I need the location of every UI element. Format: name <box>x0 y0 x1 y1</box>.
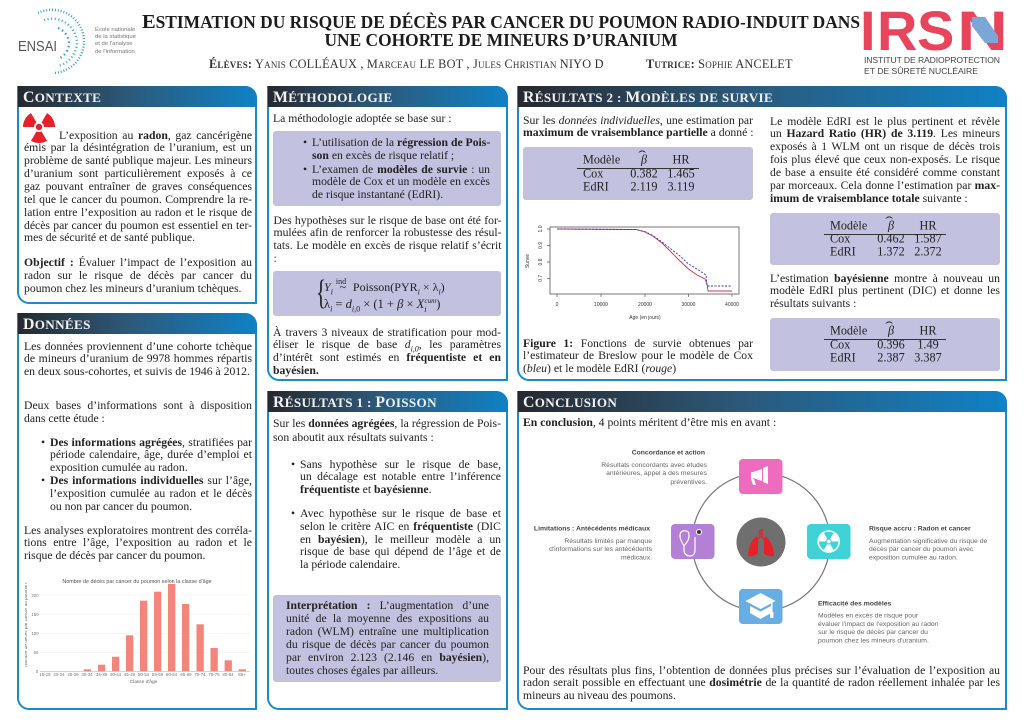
bar chart: décès par classe d'âge: Nombre de décès par cancer du poumon selon la classe d'âge <box>62 579 212 585</box>
text: contexte: L’exposition au radon, gaz cancérigène <box>59 129 252 142</box>
labels: Concordance et action <box>632 450 705 456</box>
bar chart: décès par classe d'âge: 200 <box>31 593 39 598</box>
text: objectif <box>24 256 252 295</box>
text: vraisemblance partielle: maximum de vraisemblance partielle a donné : <box>523 126 753 139</box>
icon: mégaphone <box>739 459 782 494</box>
heading: données <box>18 313 257 334</box>
text: contexte: tel que le cancer du poumon. Comprendre la re- <box>24 193 252 206</box>
bar chart: décès par classe d'âge: 85+ <box>238 672 246 677</box>
bar chart: décès par classe d'âge: 0 <box>36 669 39 674</box>
list: méthodes <box>304 136 490 201</box>
line chart: fonctions de survie: 20000 <box>638 302 652 308</box>
line chart: fonctions de survie: Survie <box>525 254 531 268</box>
labels: poumon chez les mineurs d'uranium. <box>818 638 929 644</box>
list: avec hypothèse: selon le critère AIC en fréquentiste (DIC <box>300 520 501 533</box>
text: analyses: Les analyses exploratoires montrent des corréla- <box>24 524 252 537</box>
table: vraisemblance totale: Cox <box>830 232 850 246</box>
text: interprétation: radon (WLM) entraîne une multiplication <box>286 625 489 638</box>
text: interprétation: unité de la moyenne des expositions au <box>286 612 489 625</box>
labels: d'informations sur les antécédents <box>549 546 653 553</box>
line chart: fonctions de survie: Age (en jours) <box>629 315 661 321</box>
list: bases: Des informations individuelles sur l’âge, <box>50 474 252 487</box>
bar chart: décès par classe d'âge: 50-54 <box>138 672 150 677</box>
logo: IRSN <box>860 6 1008 76</box>
labels: Modèles en excès de risque pour <box>818 612 919 620</box>
caption: figure 1 <box>523 337 753 375</box>
logo: IRSN: INSTITUT DE RADIOPROTECTION <box>864 55 1000 65</box>
text: hazard ratio: de base a ensuite été considéré comme constant <box>770 166 1000 179</box>
heading: contexte: CONTEXTE <box>23 89 101 106</box>
text: objectif: Objectif : Évaluer l’impact de l’exposition au <box>24 256 252 269</box>
text: contexte: décès par cancer du poumon est essentiel en ter- <box>24 218 252 232</box>
table: vraisemblance totale <box>770 213 1000 265</box>
heading: méthodologie: MÉTHODOLOGIE <box>273 89 393 106</box>
table: bayésien: 1.49 <box>917 338 939 352</box>
table: vraisemblance partielle: 3.119 <box>668 180 694 194</box>
table: bayésien: Cox <box>830 338 850 352</box>
text: contexte: d’uranium sont particulièrement exposés à ce <box>24 167 252 180</box>
line chart: fonctions de survie: 0 <box>556 302 559 308</box>
authors: Élèves: Yanis COLLÉAUX , Marceau LE BOT , Jules Christian NIYO D <box>209 57 604 71</box>
text: contexte: problème de santé publique majeur. Les mineurs <box>24 154 252 167</box>
formula: { <box>316 273 326 312</box>
panel: données <box>17 313 257 710</box>
bar chart: décès par classe d'âge: 100 <box>31 631 39 636</box>
table: vraisemblance partielle: β <box>641 152 647 166</box>
table: bayésien <box>770 318 1000 371</box>
line chart: fonctions de survie: 0.9 <box>538 242 544 249</box>
heading: résultats 1: RÉSULTATS 1 : POISSON <box>273 394 437 411</box>
text: perspectives <box>523 664 1000 702</box>
text: cohorte: en deux sous-cohortes, et suivis de 1946 à 2012. <box>24 365 250 378</box>
heading: conclusion <box>518 391 1007 412</box>
title <box>142 11 860 50</box>
list: bases <box>42 436 252 513</box>
list: sans hypothèse: fréquentiste et bayésienne. <box>300 483 431 496</box>
bar chart: décès par classe d'âge: 40-44 <box>110 672 122 677</box>
table: vraisemblance partielle <box>523 147 753 200</box>
bar chart: décès par classe d'âge: 30-34 <box>81 672 93 677</box>
text: perspectives: radon serait possible en effectuant une dosimétrie de la quantité de radon réellement inhalée par les <box>523 676 1000 689</box>
text: hypothèses: Des hypothèses sur le risque de base ont été for- <box>274 214 502 227</box>
line chart: fonctions de survie: 1.0 <box>538 225 544 232</box>
diagram: quatre points <box>534 450 987 644</box>
formula: ind <box>336 277 346 286</box>
text: interprétation: du risque de décès par cancer du poumon <box>286 638 489 651</box>
text: contexte: gaz pouvant entraîner de graves conséquences <box>24 180 252 193</box>
text: intro poisson: son aboutit aux résultats suivants : <box>273 431 434 444</box>
text: contexte: lation entre l’exposition au radon et le risque de <box>24 206 252 219</box>
labels: exposition cumulée au radon. <box>869 554 958 562</box>
text: hypothèses: : <box>274 252 277 265</box>
text: intro poisson: Sur les données agrégées, la régression de Pois- <box>273 417 501 430</box>
list: méthodes: L’utilisation de la régression de Pois- <box>312 136 490 149</box>
table: bayésien: β <box>888 324 894 338</box>
logo: ENSAI: de l'information <box>95 49 135 55</box>
text: hazard ratio <box>770 115 1000 205</box>
text: interprétation: par environ 2.123 (2.146 en bayésien), <box>286 651 489 664</box>
text: stratification: éliser le risque de base di,0, les paramètres <box>273 338 501 354</box>
text: stratification: d’intérêt sont estimés en fréquentiste et en <box>273 351 501 364</box>
panel: méthodologie <box>267 86 508 381</box>
table: vraisemblance totale: β <box>888 218 894 232</box>
table: vraisemblance totale: 0.462 <box>877 232 905 246</box>
icon: stéthoscope <box>671 524 714 559</box>
labels: médicaux. <box>621 554 652 562</box>
list: avec hypothèse: la période calendaire. <box>300 558 400 571</box>
list: méthodes: L’examen de modèles de survie : un <box>312 163 490 176</box>
table: vraisemblance totale: 1.587 <box>914 232 942 246</box>
text: hazard ratio: un Hazard Ratio (HR) de 3.119. Les mineurs <box>770 127 1000 140</box>
box: interprétation <box>273 595 501 682</box>
line chart: fonctions de survie: 30000 <box>682 302 696 308</box>
text: analyses: tions entre l’âge, l’exposition au radon et le <box>24 536 252 549</box>
text: stratification: À travers 3 niveaux de stratification pour mod- <box>273 326 501 339</box>
line chart: fonctions de survie: 40000 <box>725 302 739 308</box>
text: bayésienne: modèle EdRI plus pertinent (DIC) et donne les <box>770 284 1000 297</box>
list: méthodes: de risque instantané (EdRI). <box>312 188 443 201</box>
text: hazard ratio: imum de vraisemblance totale suivante : <box>770 192 968 205</box>
bar chart: décès par classe d'âge: 60-64 <box>166 672 178 677</box>
list: bases: exposition cumulée au radon. <box>50 461 188 474</box>
line chart: fonctions de survie <box>525 225 740 321</box>
table: bayésien: 2.387 <box>877 350 905 364</box>
list: avec hypothèse: en bayésien), le meilleur modèle a un <box>300 533 501 546</box>
panel: conclusion <box>517 391 1007 710</box>
list: sans hypothèse: un décalage est notable entre l’inférence <box>300 470 501 483</box>
table: vraisemblance partielle: Cox <box>583 166 603 180</box>
bar chart: décès par classe d'âge: 55-59 <box>152 672 164 677</box>
text: contexte: mes de sécurité et de santé publique. <box>24 231 195 244</box>
title: ESTIMATION DU RISQUE DE DÉCÈS PAR CANCER DU POUMON RADIO-INDUIT DANS <box>142 11 860 33</box>
text: objectif: poumon chez les mineurs d’uranium tchèques. <box>24 282 241 295</box>
list: avec hypothèse: Avec hypothèse sur le risque de base et <box>300 507 501 520</box>
list: méthodes: son en excès de risque relatif ; <box>312 149 454 162</box>
logo: ENSAI: ENSAI <box>18 39 57 55</box>
logo: ENSAI: École nationale <box>95 26 136 33</box>
icon: poumons <box>736 518 786 566</box>
icon: radiation <box>23 113 55 143</box>
bar chart: décès par classe d'âge: 80-84 <box>222 672 234 677</box>
bar chart: décès par classe d'âge: 45-49 <box>124 672 136 677</box>
labels <box>534 450 987 644</box>
table: vraisemblance partielle: Modèle <box>583 152 620 166</box>
labels: antérieures, appel à des mesures <box>606 470 708 477</box>
labels: Augmentation significative du risque de <box>869 538 987 545</box>
table: vraisemblance partielle: 2.119 <box>631 180 657 194</box>
labels: sur le risque de décès par cancer du <box>818 629 928 636</box>
labels: Résultats limités par manque <box>564 538 652 545</box>
logo: ENSAI: de la statistique <box>95 34 137 40</box>
text: cohorte: Les données proviennent d’une cohorte tchèque <box>24 340 252 353</box>
formula: ~ <box>340 280 346 294</box>
line chart: fonctions de survie: 10000 <box>594 302 608 308</box>
labels: Résultats concordants avec études <box>601 462 708 469</box>
bar chart: décès par classe d'âge: 35-39 <box>96 672 108 677</box>
box: méthodes <box>273 131 501 206</box>
labels: décès par cancer du poumon avec <box>869 546 974 553</box>
box: formule <box>273 271 501 316</box>
text: bases <box>24 399 252 425</box>
text: hazard ratio: exposés à 1 WLM ont un risque de décès trois <box>770 140 1000 153</box>
text: stratification <box>273 326 501 377</box>
list: avec hypothèse <box>292 507 501 571</box>
formula: Yi Poisson(PYRi × λi) <box>324 280 445 296</box>
heading: résultats 2 <box>518 86 1007 107</box>
text: intro conclusion: En conclusion, 4 points méritent d’être mis en avant : <box>523 416 776 429</box>
text: hazard ratio: fois plus élevé que ceux non-exposés. Le risque <box>770 153 1000 166</box>
table: vraisemblance partielle: EdRI <box>583 180 609 194</box>
logo: IRSN: ET DE SÛRETÉ NUCLÉAIRE <box>864 66 978 76</box>
list: méthodes: modèle de Cox et un modèle en excès <box>312 175 490 188</box>
labels: préventives. <box>670 479 707 486</box>
text: bayésienne: résultats suivants : <box>770 297 856 310</box>
table: vraisemblance totale: Modèle <box>830 218 867 232</box>
list: bases: l’exposition cumulée au radon et le décès <box>50 487 252 500</box>
heading: résultats 2: RÉSULTATS 2 : MODÈLES DE SURVIE <box>523 89 773 106</box>
formula <box>316 273 445 314</box>
text: cohorte: de mineurs d’uranium de 9978 hommes répartis <box>24 352 252 365</box>
text: perspectives: mineurs au niveau des poumons. <box>523 689 676 702</box>
text: analyses: risque de décès par cancer du poumon. <box>24 549 205 562</box>
table: bayésien: 3.387 <box>914 350 942 364</box>
text: hypothèses: mulées afin de renforcer la robustesse des résul- <box>274 226 502 239</box>
heading: données: DONNÉES <box>23 316 91 333</box>
text: bases: dans cette étude : <box>24 412 105 425</box>
text: cohorte <box>24 340 252 378</box>
text: analyses <box>24 524 252 562</box>
text: interprétation: toutes choses égales par ailleurs. <box>286 664 438 677</box>
list: sans hypothèse <box>292 458 501 496</box>
line chart: fonctions de survie: 0.8 <box>538 258 544 265</box>
table: bayésien: HR <box>920 324 936 338</box>
caption: figure 1: l’estimateur de Breslow pour le modèle de Cox <box>523 349 753 362</box>
list: sans hypothèse: Sans hypothèse sur le risque de base, <box>300 458 501 471</box>
formula: λi = di,0 × (1 + β × Xicum) <box>324 297 440 314</box>
heading: conclusion: CONCLUSION <box>523 394 617 411</box>
text: vraisemblance partielle: Sur les données individuelles, une estimation par <box>523 114 753 127</box>
labels: Limitations : Antécédents médicaux <box>534 526 650 532</box>
title: UNE COHORTE DE MINEURS D’URANIUM <box>324 30 678 50</box>
icon: diplôme <box>739 589 782 624</box>
text: hazard ratio: par morceaux. Cela donne l’estimation par max- <box>770 179 1000 192</box>
table: vraisemblance partielle: 1.465 <box>667 166 695 180</box>
bar chart: décès par classe d'âge <box>25 579 250 685</box>
bar chart: décès par classe d'âge: Classe d'âge <box>130 679 158 685</box>
authors: Tutrice: Sophie ANCELET <box>646 57 793 71</box>
table: bayésien: 0.396 <box>877 338 905 352</box>
bar chart: décès par classe d'âge: 50 <box>34 650 39 655</box>
bar chart: décès par classe d'âge: 15-19 <box>39 672 51 677</box>
icon: radiation <box>807 524 850 559</box>
logo: ENSAI <box>18 8 137 74</box>
labels: Efficacité des modèles <box>818 600 892 608</box>
bar chart: décès par classe d'âge: 65-69 <box>180 672 192 677</box>
text: bases: Deux bases d’informations sont à disposition <box>24 399 252 412</box>
table: vraisemblance totale: EdRI <box>830 244 856 258</box>
heading: contexte <box>18 86 257 107</box>
line chart: fonctions de survie: 0.7 <box>538 275 544 282</box>
list: bases: ou non par cancer du poumon. <box>50 500 192 513</box>
authors <box>209 57 793 71</box>
bar chart: décès par classe d'âge: 70-74 <box>194 672 206 677</box>
text: objectif: radon sur le risque de décès par cancer du <box>24 269 252 282</box>
bar chart: décès par classe d'âge: 150 <box>31 612 39 617</box>
panel: résultats 2 <box>517 86 1007 381</box>
table: bayésien: Modèle <box>830 324 867 338</box>
caption: figure 1: (bleu) et le modèle EdRI (rouge) <box>523 362 676 375</box>
text: stratification: bayésien. <box>273 364 319 377</box>
caption: figure 1: Figure 1: Fonctions de survie obtenues par <box>523 337 753 350</box>
text: contexte <box>24 129 252 244</box>
bar chart: décès par classe d'âge: 25-29 <box>67 672 79 677</box>
list: bases: période calendaire, âge, durée d’emploi et <box>50 448 252 461</box>
list: avec hypothèse: risque de base qui dépend de l’âge et de <box>300 545 501 558</box>
table: vraisemblance totale: HR <box>920 218 936 232</box>
text: intro méthodologie: La méthodologie adoptée se base sur : <box>273 112 452 125</box>
table: bayésien: EdRI <box>830 350 856 364</box>
panel: contexte <box>17 86 257 304</box>
table: vraisemblance partielle: HR <box>673 152 689 166</box>
table: vraisemblance partielle: 0.382 <box>630 166 658 180</box>
text: interprétation: Interprétation : L’augmentation d’une <box>286 599 489 612</box>
labels: évaluer l'impact de l'exposition au radon <box>818 621 939 628</box>
text: bayésienne: L’estimation bayésienne montre à nouveau un <box>770 272 1000 285</box>
text: hazard ratio: Le modèle EdRI est le plus pertinent et révèle <box>770 115 1000 128</box>
table: vraisemblance totale: 2.372 <box>914 244 942 258</box>
list: bases: Des informations agrégées, stratifiées par <box>50 436 252 449</box>
table: vraisemblance totale: 1.372 <box>877 244 905 258</box>
heading: méthodologie <box>268 86 508 107</box>
heading: résultats 1 <box>268 391 508 412</box>
text: hypothèses: tats. Le modèle en excès de risque relatif s’écrit <box>274 239 502 252</box>
text: perspectives: Pour des résultats plus fins, l’obtention de données plus précises sur l’évaluation de l’exposition au <box>523 664 1000 677</box>
text: vraisemblance partielle <box>523 114 753 139</box>
text: hypothèses <box>274 214 502 265</box>
panel: résultats 1 <box>267 391 508 710</box>
labels: Risque accru : Radon et cancer <box>869 526 971 532</box>
logo: ENSAI: et de l'analyse <box>95 41 133 47</box>
text: contexte: émis par la désintégration de l’uranium, est un <box>24 141 252 154</box>
text: intro poisson <box>273 417 501 444</box>
text: bayésienne <box>770 272 1000 310</box>
text: interprétation <box>286 599 489 677</box>
bar chart: décès par classe d'âge: 75-79 <box>208 672 220 677</box>
bar chart: décès par classe d'âge: 20-24 <box>53 672 65 677</box>
